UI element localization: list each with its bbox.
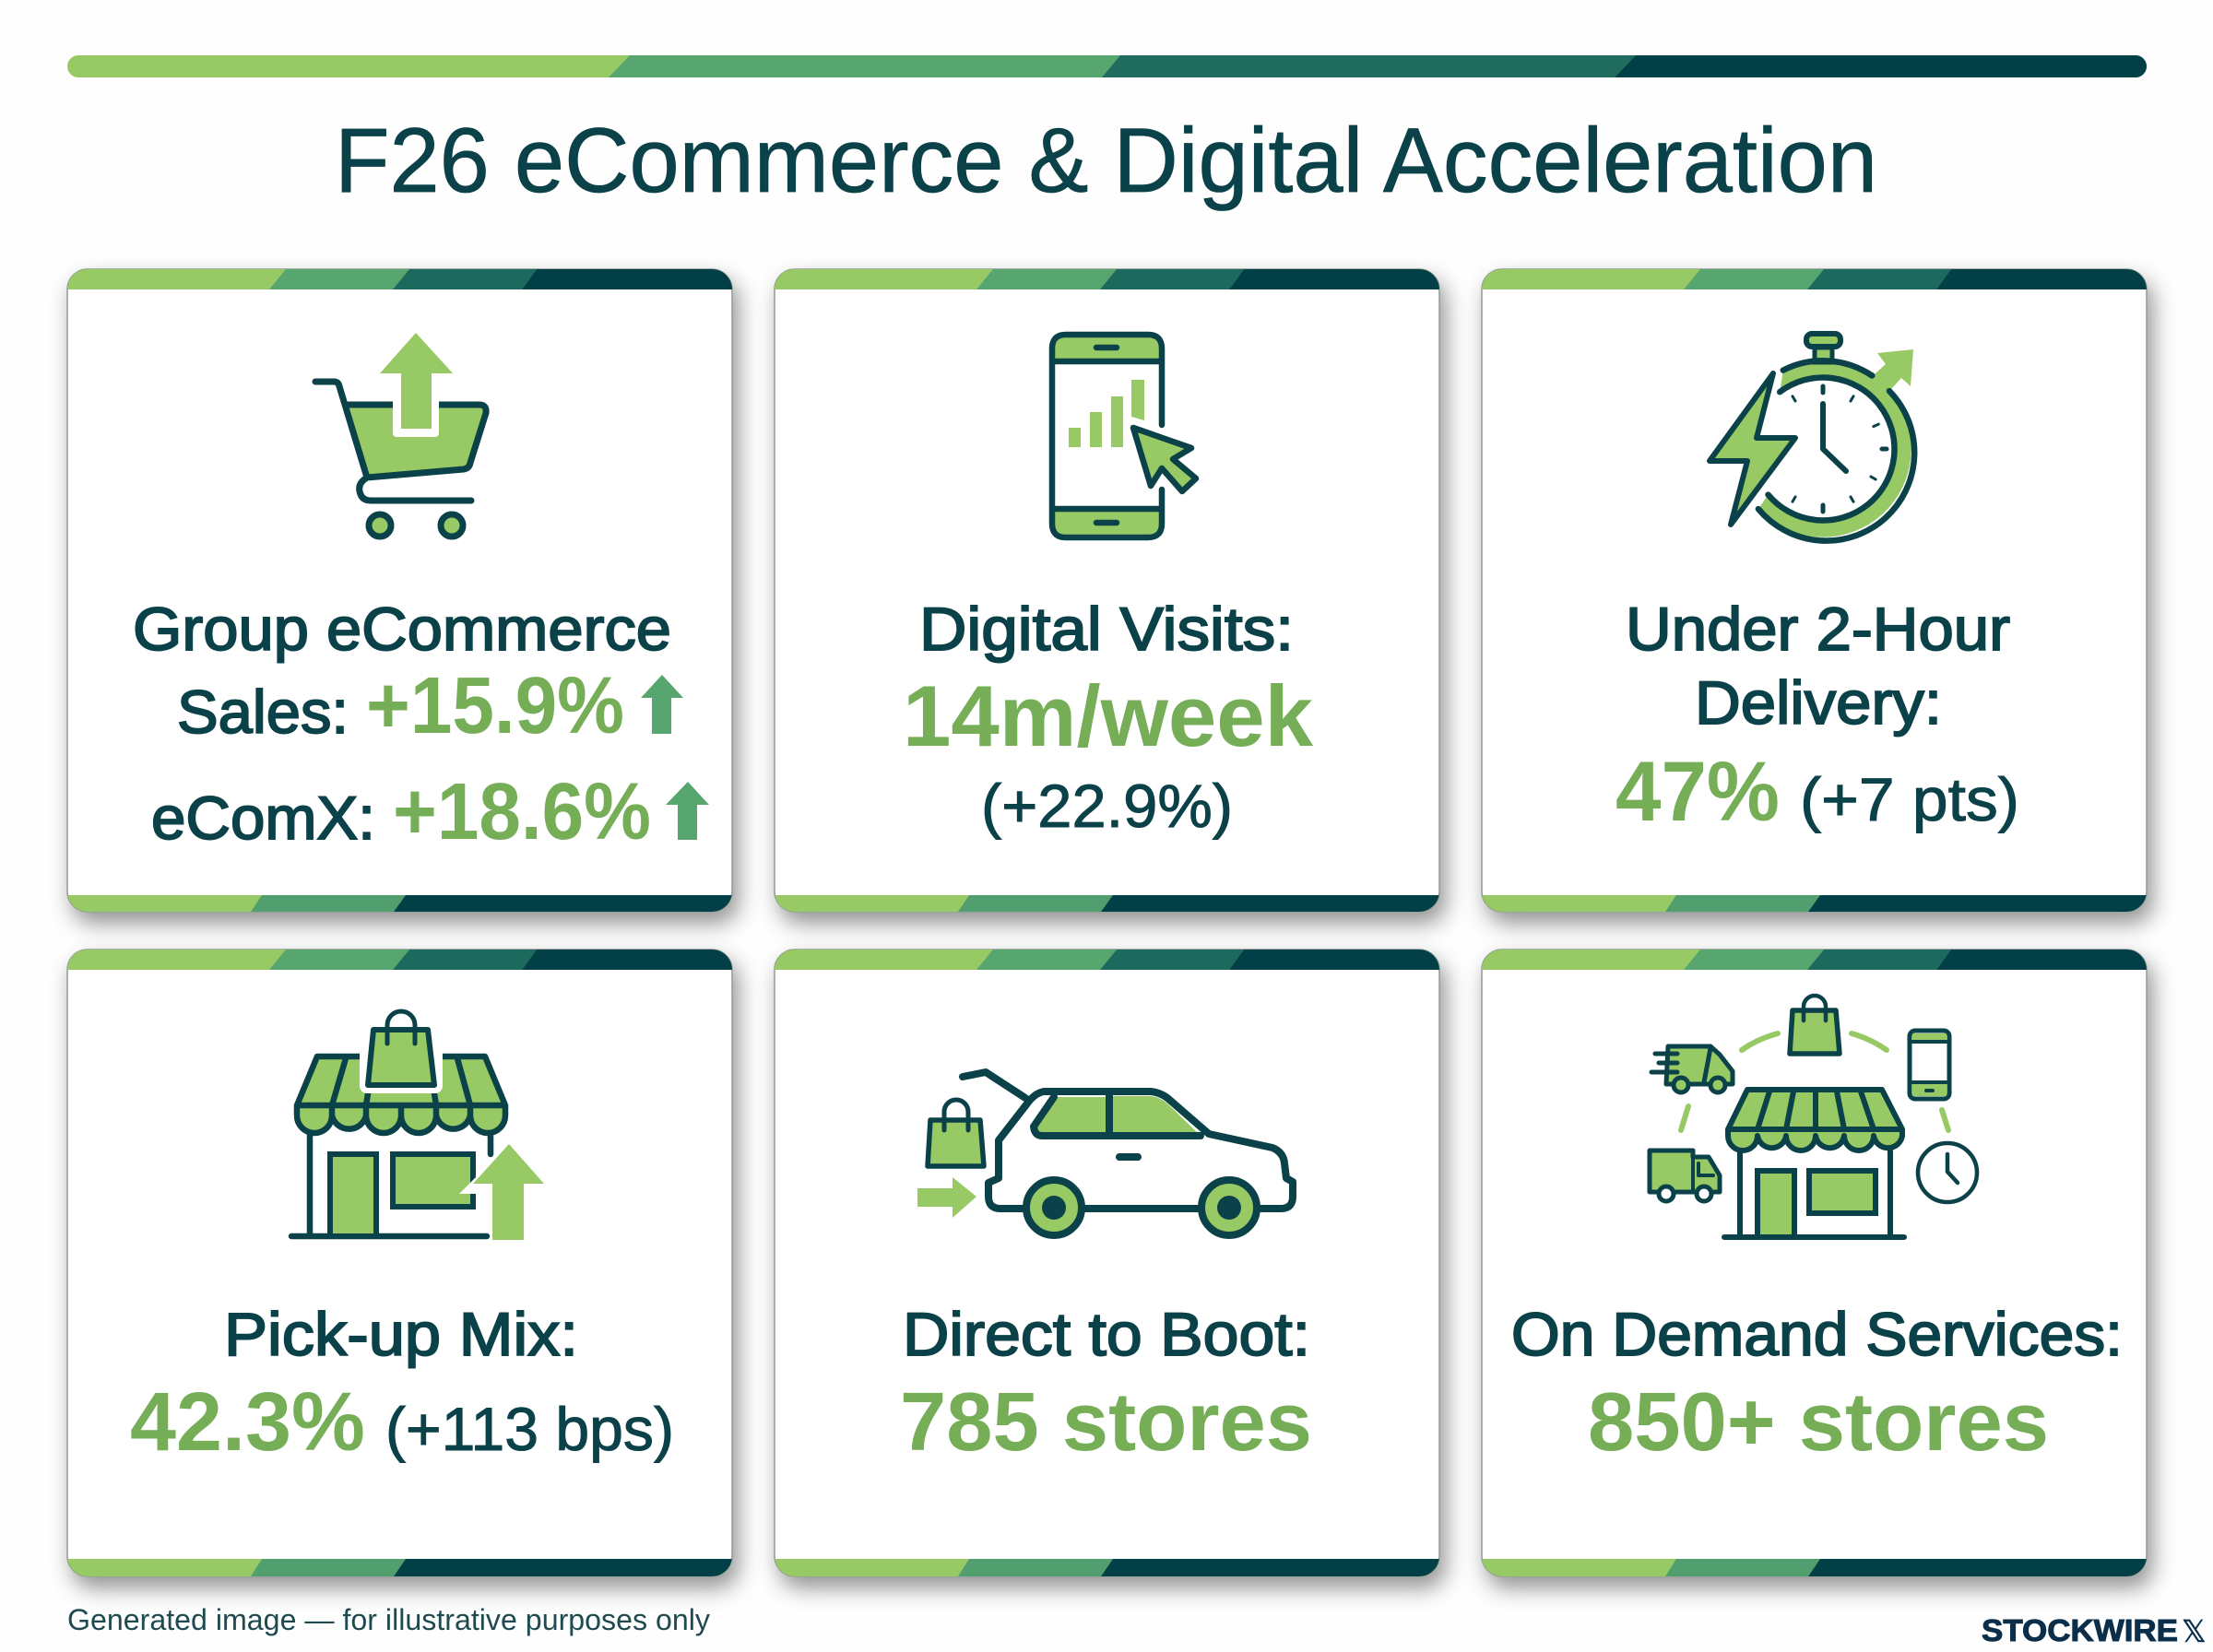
top gradient bar (67, 55, 2147, 77)
brand wordmark: STOCKWIRE (1982, 1613, 2178, 1647)
icon: phone with bars and cursor (1052, 335, 1196, 537)
icon: stopwatch with lightning bolt (1710, 334, 1914, 541)
heading: Digital Visits: (919, 595, 1294, 663)
value: 850+ stores (1588, 1376, 2049, 1469)
panel: under 2-hour delivery (1482, 269, 2147, 912)
value: 47% (1615, 745, 1780, 839)
icon: up arrow (666, 782, 709, 840)
title: F26 eCommerce & Digital Acceleration (335, 109, 1877, 211)
icon: shopping cart with up arrow (315, 333, 487, 537)
brand wordmark: 𝕏 (2182, 1613, 2207, 1649)
heading line two: Delivery: (1695, 668, 1942, 737)
heading: Under 2-Hour (1626, 595, 2010, 663)
heading: Pick-up Mix: (224, 1300, 578, 1368)
icon: store with bag and arrow (291, 1011, 544, 1240)
panel: on demand services (1482, 950, 2147, 1576)
ecomx value: +18.6% (393, 767, 651, 856)
icon: car with bag and arrow (917, 1072, 1293, 1235)
heading: On Demand Services: (1511, 1300, 2123, 1368)
change: (+22.9%) (981, 772, 1233, 840)
value: 42.3% (130, 1376, 365, 1469)
heading: Group eCommerce (133, 595, 671, 663)
icon: store with delivery services (1650, 996, 1977, 1237)
panel: pick-up mix (67, 950, 732, 1576)
panel: direct to boot (775, 950, 1439, 1576)
footer note: Generated image — for illustrative purposes only (67, 1603, 710, 1636)
change: (+113 bps) (385, 1395, 674, 1463)
icon: up arrow (641, 675, 683, 734)
ecomx label: eComX: (151, 784, 375, 852)
panel: digital visits (775, 269, 1439, 912)
value: 14m/week (903, 667, 1314, 764)
sales label: Sales: (177, 678, 349, 746)
heading: Direct to Boot: (903, 1300, 1310, 1368)
change: (+7 pts) (1800, 765, 2019, 833)
sales value: +15.9% (366, 661, 624, 750)
value: 785 stores (900, 1376, 1312, 1469)
panel: group ecommerce sales (67, 269, 732, 912)
